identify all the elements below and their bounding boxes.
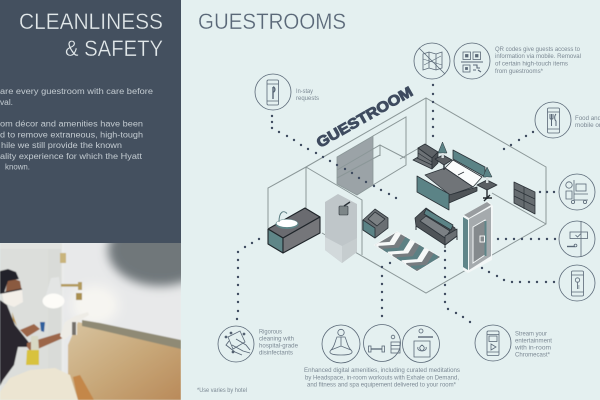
room outline walls: [268, 98, 546, 293]
bed: [417, 150, 485, 210]
label: stream entertainment: entertainment: [515, 338, 552, 344]
icon: meditation figure: [322, 325, 360, 363]
bookcase: [514, 182, 535, 214]
icon: hand cleaning with cloth: [218, 326, 254, 362]
nightstand and lamp right: [477, 167, 497, 201]
icon: crossed-out map: [414, 43, 450, 79]
label: stream entertainment: [514, 330, 552, 358]
label: QR codes: from guestrooms*: [495, 68, 544, 75]
rug with chevrons: [374, 232, 441, 272]
label: stream entertainment: Stream your: [515, 330, 547, 338]
door: [463, 201, 493, 273]
text block: intro copy: ality experience for which the Hyatt: [0, 152, 143, 161]
icon: dumbbell and equipment: [364, 324, 400, 362]
sofa: [415, 208, 457, 248]
label: enhanced digital amenities: and fitness and spa equipement delivered to your room*: [307, 382, 457, 388]
photo: housekeeper cleaning headboard: [0, 243, 181, 400]
text block: intro copy: are every guestroom with care before: [0, 87, 154, 96]
text block: intro copy: om décor and amenities have been: [0, 120, 143, 128]
vanity and sink: [268, 208, 320, 253]
label: rigorous cleaning: [259, 328, 298, 356]
label: rigorous cleaning: disinfectants: [259, 350, 293, 356]
label: rigorous cleaning: cleaning with: [259, 336, 294, 342]
label: QR codes: [495, 46, 581, 75]
label: stream entertainment: Chromecast*: [515, 352, 551, 358]
icon: food phone: [535, 102, 571, 138]
label: in-stay requests: In-stay: [296, 88, 314, 95]
title: cleanliness and safety: CLEANLINESS: [19, 9, 163, 34]
label: QR codes: information via mobile. Removal: [495, 53, 581, 60]
footnote: *Use varies by hotel: [197, 387, 247, 394]
icon: in-stay requests phone: [255, 74, 291, 110]
label: food and mobile ordering: [575, 115, 600, 129]
label: QR codes: QR codes give guests access to: [495, 46, 580, 53]
panel: cleanliness and safety: [0, 0, 181, 243]
heading: guestrooms: GUESTROOMS: [198, 9, 346, 34]
title: cleanliness and safety: & SAFETY: [65, 36, 163, 61]
label: in-stay requests: [296, 88, 319, 102]
column with dispenser: [325, 194, 357, 263]
dresser: [413, 144, 438, 169]
armchair: [363, 209, 388, 238]
label: stream entertainment: with in-room: [514, 344, 551, 352]
label: in-stay requests: requests: [296, 95, 319, 102]
label: enhanced digital amenities: Enhanced digital amenities, including curated meditations: [304, 367, 460, 374]
icon: mobile key phone: [559, 265, 595, 301]
text block: intro copy: hile we still provide the known: [1, 141, 122, 150]
label: enhanced digital amenities: [304, 367, 460, 388]
label: QR codes: of certain high-touch items: [495, 60, 568, 68]
icon: room delivery cart: [559, 174, 595, 210]
back wall panel: gray shower glass: [337, 136, 373, 195]
label: rigorous cleaning: Rigorous: [259, 328, 282, 336]
text block: intro copy: known.: [5, 162, 30, 172]
icon: chromecast phone: [475, 325, 511, 361]
label: enhanced digital amenities: by Headspace, in-room workouts with Exhale on Demand,: [305, 374, 459, 382]
title: cleanliness and safety: [19, 9, 163, 61]
dotted leader lines: [236, 84, 556, 323]
sign: guestroom wall lettering: GUESTROOM: [314, 84, 416, 151]
text block: intro copy: val.: [0, 98, 13, 107]
icon: spa bag: [402, 326, 440, 362]
text block: intro copy: d to remove extraneous, high-tough: [0, 130, 143, 140]
room illustration: [268, 84, 546, 293]
nightstand and lamp left: [435, 142, 452, 170]
text block: intro copy: [0, 87, 154, 172]
label: rigorous cleaning: hospital-grade: [259, 342, 298, 350]
icon: door seal with check: [559, 221, 595, 257]
icon: QR code: [454, 43, 490, 79]
